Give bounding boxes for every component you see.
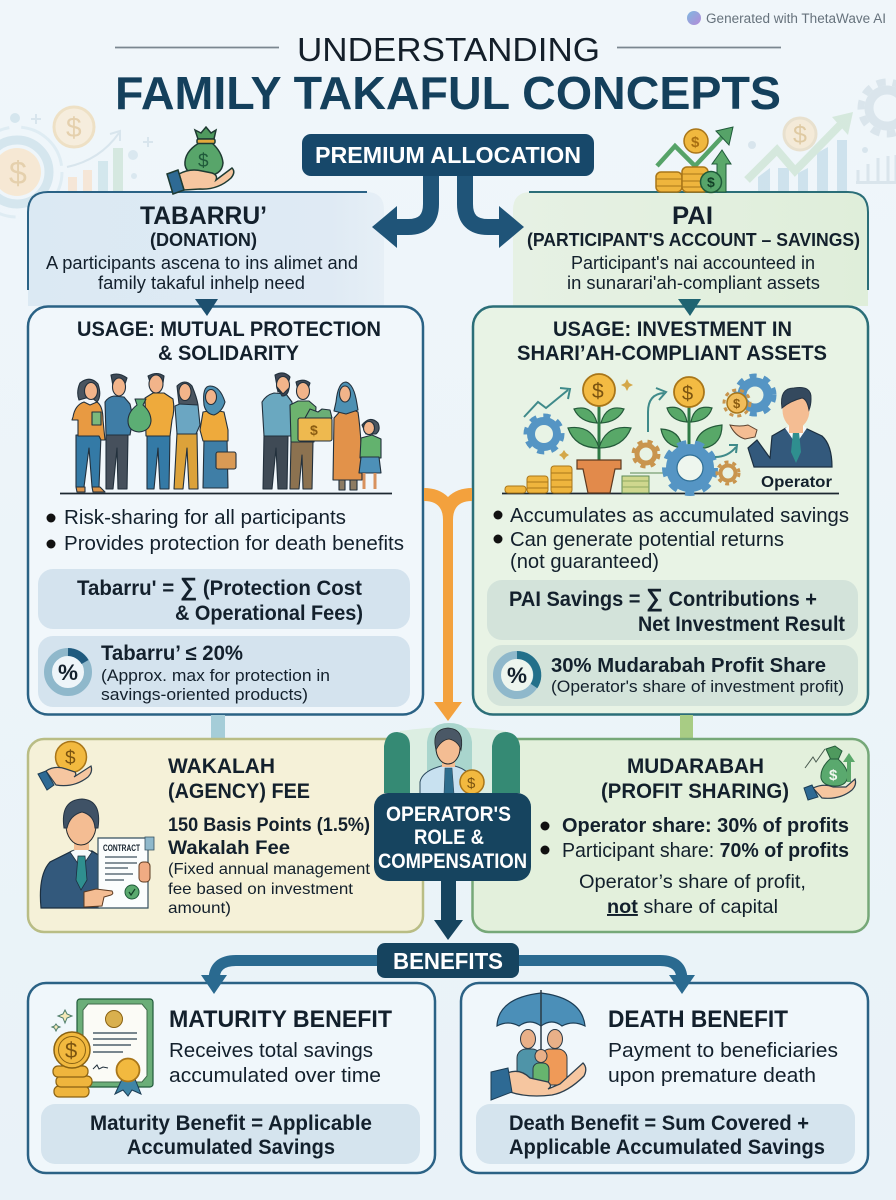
panel: PAI header: PAI: [672, 202, 713, 230]
icon: certificate with coins: $: [65, 1038, 77, 1063]
Mudarabah text: Participant share: 70% of profits: [562, 840, 849, 862]
panel: PAI header: (PARTICIPANT'S ACCOUNT – SAVINGS): [527, 230, 860, 250]
illustration: growing investments and operator: $: [592, 380, 604, 403]
background decoration: left finance motifs: $: [66, 112, 82, 143]
background decoration: left finance motifs: [0, 107, 153, 217]
Mudarabah text: Operator’s share of profit,: [579, 871, 806, 893]
arrow: Tabarru' to usage: [195, 299, 218, 316]
formula: PAI savings: [487, 580, 858, 640]
title: FAMILY TAKAFUL CONCEPTS: [115, 67, 781, 119]
arrow: PAI to usage: [678, 299, 701, 316]
bullet list: [46, 507, 404, 555]
illustration: growing investments and operator: [502, 374, 839, 494]
background decoration: right finance motifs: [747, 82, 896, 192]
background decoration: left finance motifs: $: [9, 155, 27, 191]
death benefit text: Payment to beneficiaries: [608, 1040, 838, 1062]
death benefit text: upon premature death: [608, 1065, 816, 1087]
title: UNDERSTANDING: [297, 31, 600, 68]
background decoration: right finance motifs: $: [793, 121, 807, 149]
callout: Tabarru' limit: savings-oriented products): [101, 685, 308, 704]
illustration: growing investments and operator: $: [733, 396, 741, 411]
title: [115, 31, 781, 119]
usage heading: USAGE: MUTUAL PROTECTION: [77, 317, 381, 341]
callout: Tabarru' limit: Tabarru’ ≤ 20%: [101, 642, 243, 665]
icon: hand with money bag: $: [198, 151, 209, 172]
maturity benefit text: MATURITY BENEFIT: [169, 1006, 392, 1033]
panel: PAI header: [513, 192, 868, 306]
formula: PAI savings: PAI Savings = ∑ Contributions +: [509, 584, 817, 612]
callout: mudarabah profit share: [487, 645, 858, 706]
panel: Tabarru' header: (DONATION): [150, 230, 257, 250]
icon: coins and growth arrow: $: [691, 134, 700, 151]
formula: maturity benefit: [41, 1104, 420, 1164]
heading: operator's role: ROLE &: [414, 826, 484, 849]
callout: mudarabah profit share: %: [507, 663, 527, 688]
death benefit text: DEATH BENEFIT: [608, 1006, 788, 1033]
heading: operator's role: OPERATOR'S: [386, 803, 511, 826]
heading: premium allocation: PREMIUM ALLOCATION: [315, 142, 581, 168]
bullet list: Provides protection for death benefits: [64, 533, 404, 555]
connector: right usage to Mudarabah: [680, 715, 693, 740]
formula: death benefit: Death Benefit = Sum Covered +: [509, 1112, 809, 1135]
icon: coins and growth arrow: $: [707, 174, 715, 190]
illustration: growing investments and operator: Operator: [761, 474, 832, 491]
panel: Tabarru' header: TABARRU’: [140, 202, 267, 230]
connector: left usage to Wakalah: [211, 715, 225, 740]
callout: Tabarru' limit: %: [58, 660, 78, 685]
icon: hand with money bag: [167, 127, 234, 194]
panel: maturity benefit: [28, 983, 435, 1173]
Mudarabah text: [540, 755, 849, 918]
formula: Tabarru': [38, 569, 410, 629]
usage heading: SHARI’AH-COMPLIANT ASSETS: [517, 341, 827, 365]
panel: Tabarru' header: [28, 192, 384, 306]
illustration: growing investments and operator: $: [682, 383, 693, 405]
callout: mudarabah profit share: 30% Mudarabah Profit Share: [551, 655, 826, 677]
maturity benefit text: [169, 1006, 392, 1087]
icon: hand with money bag and arrow: [804, 746, 856, 800]
panel: Mudarabah: [472, 739, 868, 932]
panel: PAI header: in sunarari'ah-compliant assets: [567, 272, 820, 293]
icon: hand with coin: $: [65, 748, 76, 769]
usage heading: [517, 317, 827, 365]
illustration: community of participants: $: [310, 422, 318, 438]
maturity benefit text: Receives total savings: [169, 1040, 373, 1062]
icon: hand with coin: [38, 742, 92, 790]
bullet list: Can generate potential returns: [510, 529, 784, 551]
bullet list: (not guaranteed): [510, 551, 659, 573]
Wakalah text: (Fixed annual management: [168, 861, 371, 878]
icon: coins and growth arrow: [656, 127, 733, 192]
panel: mutual protection usage: [28, 299, 423, 714]
formula: maturity benefit: Maturity Benefit = Applicable: [90, 1112, 372, 1135]
heading: operator's role: COMPENSATION: [378, 850, 527, 873]
arrows: benefits split: [201, 960, 695, 994]
icon: operator figure with pillars: [384, 723, 520, 795]
usage heading: [77, 317, 381, 365]
panel: death benefit: [461, 983, 868, 1173]
bullet list: Accumulates as accumulated savings: [510, 505, 849, 527]
heading: premium allocation: [302, 134, 594, 176]
heading: benefits: [377, 943, 519, 978]
illustration: community of participants: [60, 373, 392, 494]
illustration: agent with contract: [40, 799, 154, 908]
illustration: agent with contract: CONTRACT: [103, 843, 140, 853]
callout: Tabarru' limit: (Approx. max for protection in: [101, 666, 330, 685]
Mudarabah text: (PROFIT SHARING): [601, 780, 789, 803]
Wakalah text: fee based on investment: [168, 881, 354, 898]
watermark: Generated with ThetaWave AI: [706, 11, 886, 26]
Mudarabah text: Operator share: 30% of profits: [562, 815, 849, 837]
panel: Tabarru' header: A participants ascena to ins alimet and: [46, 252, 358, 273]
Wakalah text: [168, 755, 371, 917]
death benefit text: [608, 1006, 838, 1087]
maturity benefit text: accumulated over time: [169, 1065, 381, 1087]
panel: Tabarru' header: family takaful inhelp need: [98, 272, 305, 293]
Wakalah text: 150 Basis Points (1.5%): [168, 814, 370, 836]
formula: PAI savings: Net Investment Result: [638, 613, 845, 636]
icon: umbrella over family in hand: [491, 990, 586, 1100]
heading: benefits: BENEFITS: [393, 948, 503, 974]
formula: Tabarru': Tabarru' = ∑ (Protection Cost: [77, 573, 362, 601]
panel: PAI header: Participant's nai accounteed in: [571, 252, 815, 273]
formula: maturity benefit: Accumulated Savings: [127, 1136, 335, 1159]
arrow: operator to benefits: [434, 880, 463, 940]
formula: death benefit: Applicable Accumulated Savings: [509, 1136, 825, 1159]
panel: investment usage: [473, 299, 868, 714]
Wakalah text: Wakalah Fee: [168, 837, 290, 859]
Mudarabah text: MUDARABAH: [627, 755, 764, 778]
formula: death benefit: [476, 1104, 855, 1164]
Wakalah text: (AGENCY) FEE: [168, 780, 310, 803]
callout: mudarabah profit share: (Operator's share of investment profit): [551, 678, 844, 696]
usage heading: & SOLIDARITY: [158, 341, 299, 365]
callout: Tabarru' limit: [38, 636, 410, 707]
bullet list: Risk-sharing for all participants: [64, 507, 346, 529]
icon: certificate with coins: [52, 999, 153, 1097]
usage heading: USAGE: INVESTMENT IN: [553, 317, 792, 341]
icon: operator figure with pillars: $: [467, 775, 476, 792]
bullet list: [494, 505, 849, 573]
icon: hand with money bag and arrow: $: [829, 767, 838, 784]
arrows: premium split: [372, 176, 524, 248]
Wakalah text: amount): [168, 900, 231, 917]
formula: Tabarru': & Operational Fees): [175, 602, 363, 625]
arrow: orange merge to operator: [424, 488, 472, 721]
panel: Wakalah fee: [28, 739, 423, 932]
heading: operator's role: [374, 793, 531, 881]
Wakalah text: WAKALAH: [168, 755, 275, 778]
Mudarabah text: not share of capital: [607, 896, 778, 918]
